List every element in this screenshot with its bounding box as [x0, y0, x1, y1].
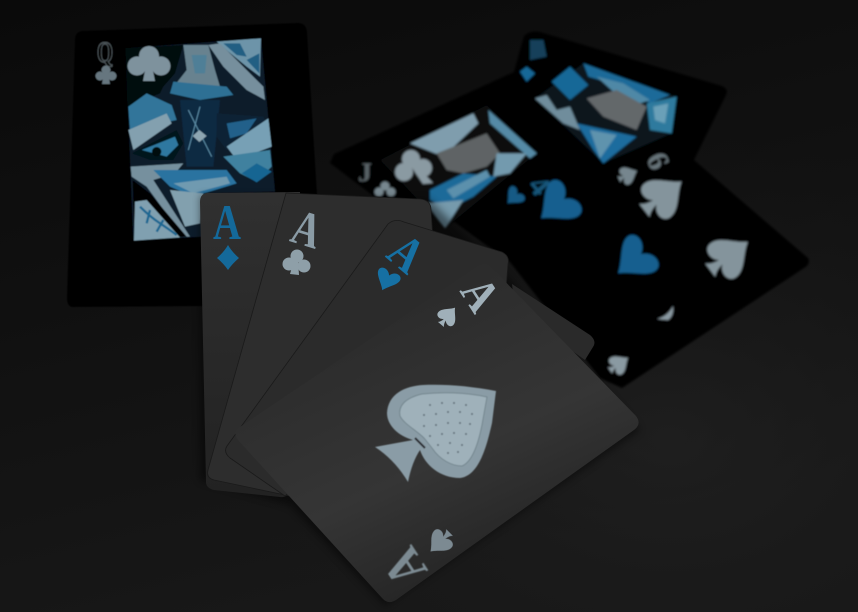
small spade six	[615, 163, 641, 187]
letter A top: A	[450, 268, 510, 321]
big spade six	[631, 165, 695, 227]
big club jack	[395, 150, 433, 184]
four index: 4	[522, 170, 557, 202]
king artwork	[520, 40, 677, 163]
diamond	[217, 245, 239, 270]
small spade bottom	[422, 524, 458, 560]
big heart lower	[604, 232, 662, 290]
ace of spades	[235, 264, 639, 602]
small club jack	[374, 182, 396, 196]
letter A grey: A	[285, 198, 329, 260]
queen index: Q	[97, 36, 113, 69]
small spade top	[433, 301, 463, 331]
large ornate spade	[375, 385, 496, 482]
queen artwork	[126, 38, 275, 241]
six index: 6	[639, 147, 676, 175]
small blue heart	[371, 266, 402, 295]
crescent	[657, 306, 673, 320]
ace of hearts	[226, 220, 508, 496]
big heart upper	[527, 177, 585, 235]
ace of diamonds	[200, 192, 300, 497]
spade dots	[423, 402, 473, 454]
spade lower	[698, 225, 760, 287]
shadow under aces	[200, 195, 640, 606]
ace of clubs	[208, 193, 433, 496]
jack artwork	[380, 105, 537, 228]
small bottom spade	[604, 350, 634, 378]
letter A blue: A	[213, 194, 241, 250]
jack index: J	[358, 158, 372, 187]
lower right sliver card	[512, 284, 594, 360]
letter A blue rotated: A	[377, 222, 436, 284]
back black cards	[330, 32, 809, 388]
small heart	[501, 185, 526, 210]
club	[282, 250, 310, 275]
queen of clubs card	[67, 23, 317, 307]
big club	[128, 46, 170, 81]
small club	[96, 66, 116, 84]
letter A bottom: A	[371, 537, 439, 597]
king and jack and six card bodies	[330, 32, 809, 388]
